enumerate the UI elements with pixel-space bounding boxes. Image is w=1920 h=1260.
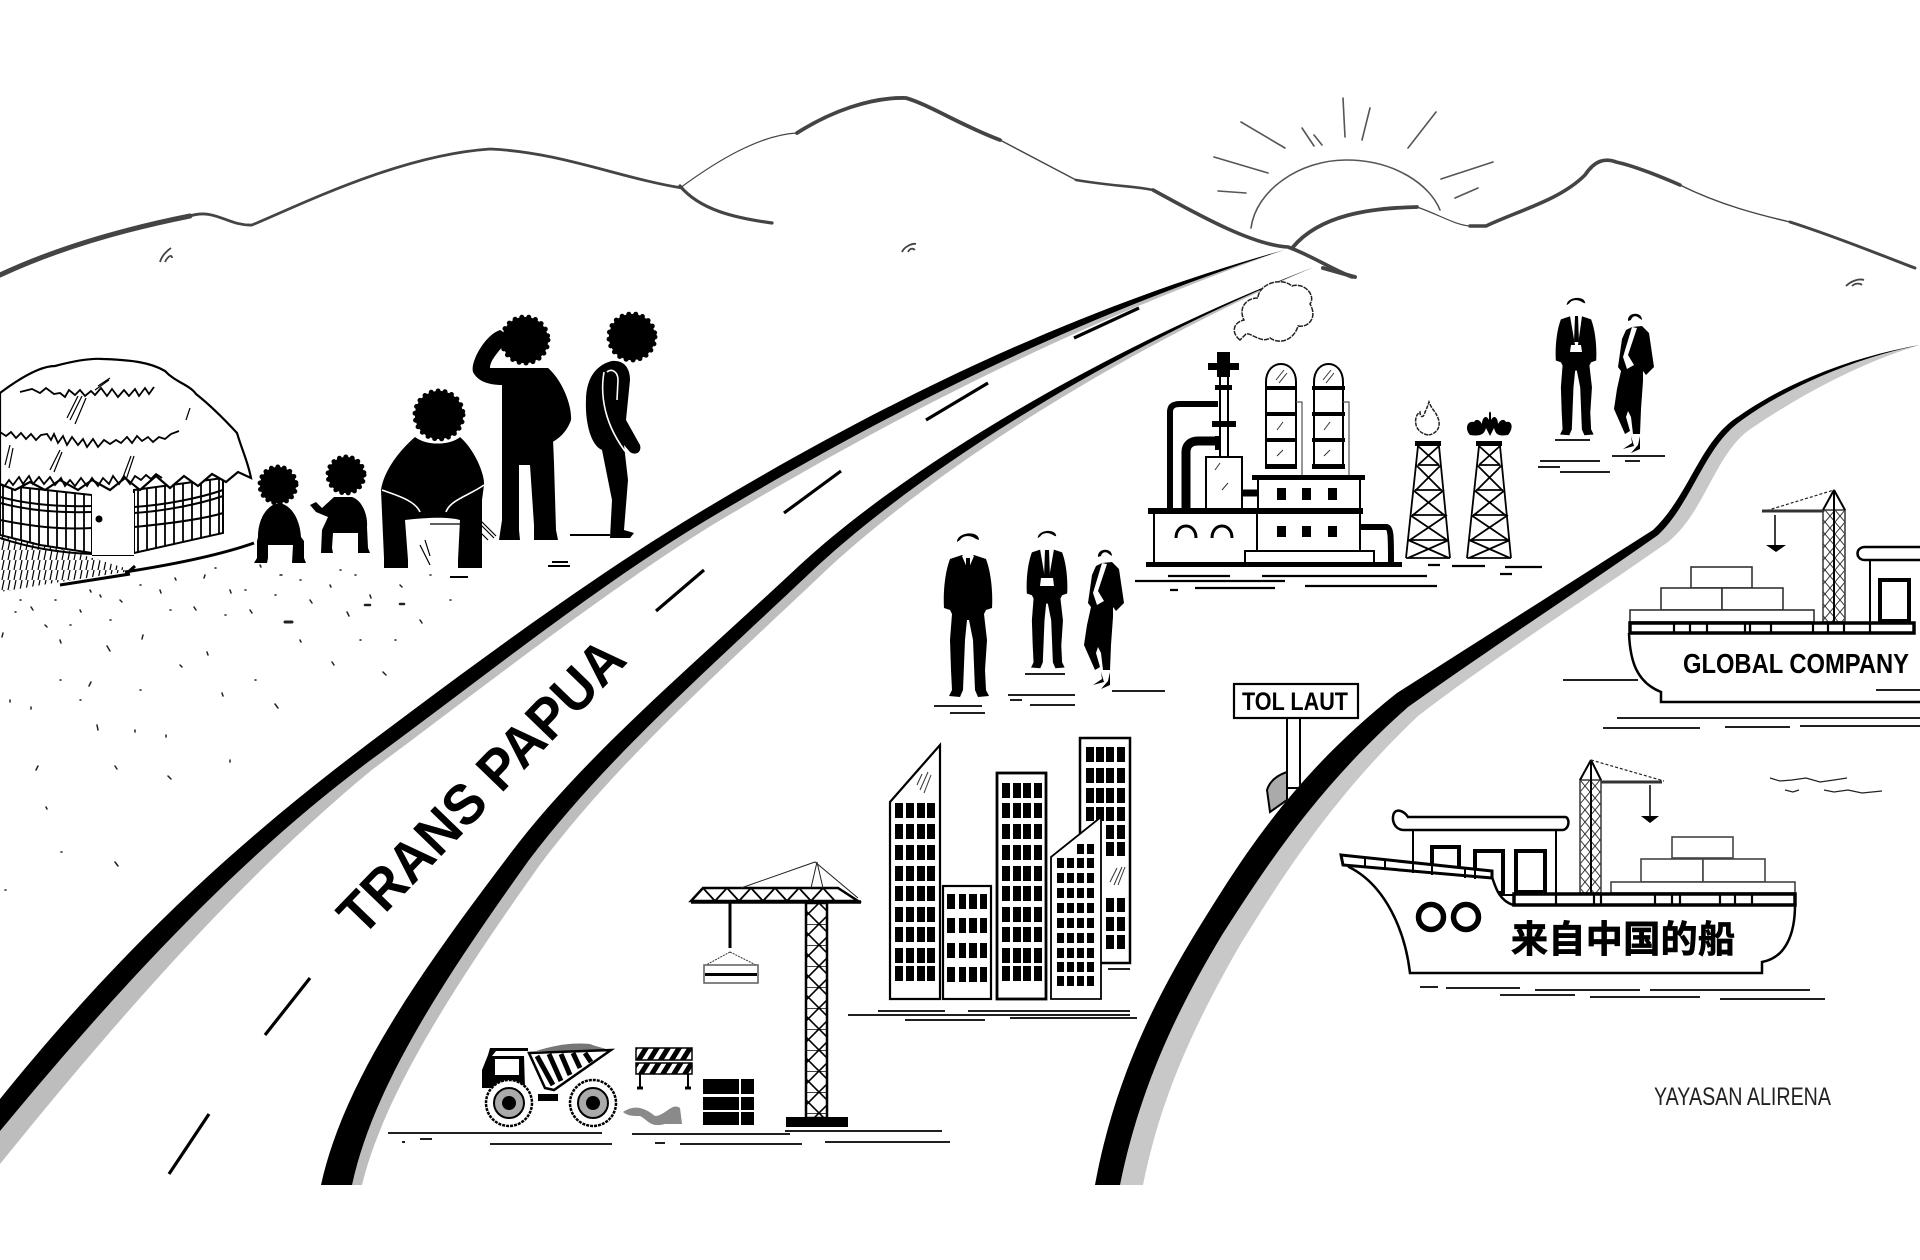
road title: TRANS PAPUA: [325, 626, 638, 947]
person: standing, side view: [586, 314, 655, 538]
refinery: pipes: [1170, 404, 1218, 508]
hut: skirt: [0, 535, 125, 592]
hut: thatch marks: [5, 378, 190, 480]
hut: [0, 359, 254, 592]
oil derrick with black plume: [1467, 412, 1512, 558]
crane boom: [691, 888, 861, 902]
building: short block: [943, 886, 991, 999]
sign post: [1287, 718, 1300, 788]
sign: Tol Laut: TOL LAUT: [1242, 688, 1348, 716]
hut: thatch fringes: [0, 387, 179, 487]
city buildings: [848, 738, 1137, 1020]
ground marks under people: [450, 535, 610, 577]
shadows: [934, 674, 1165, 713]
china ship: crane: [1580, 760, 1664, 893]
global ship: hull: [1629, 633, 1920, 702]
china ship: portholes: [1418, 904, 1478, 930]
building: back tower: [1080, 738, 1130, 963]
sun with rays: [1214, 98, 1493, 228]
sign rubble: [1267, 772, 1287, 812]
businessman 1: [944, 533, 992, 697]
china ship: name: 来自中国的船: [1511, 909, 1735, 963]
ground lines: city: [848, 969, 1137, 1020]
truck: dump bed: [529, 1050, 611, 1090]
credit: YAYASAN ALIRENA: [1654, 1083, 1831, 1111]
china ship: cabin: [1393, 811, 1568, 895]
ground lines: construction site: [388, 1131, 950, 1144]
refinery: lower block: [1154, 511, 1360, 563]
refinery: towers: [1266, 364, 1296, 465]
hut: walls: [0, 478, 223, 555]
waves: [1770, 778, 1882, 793]
businessman 2: [1027, 531, 1067, 668]
china ship: water: [1420, 987, 1825, 999]
crane load: [704, 952, 758, 983]
building: tall tower: [997, 773, 1046, 999]
ship from China: [1341, 760, 1825, 999]
global ship: cabin: [1858, 547, 1920, 622]
refinery: stack: [1220, 372, 1228, 458]
crane apex and cables: [741, 862, 858, 898]
truck: cab: [482, 1048, 528, 1088]
crane mast: [806, 903, 827, 1118]
road: left edge: [0, 250, 1284, 1164]
businesswoman: [1614, 314, 1654, 453]
businessman: [1556, 298, 1596, 435]
hut: door: [92, 493, 134, 555]
crane hook: [728, 903, 732, 948]
ground line near hut: [60, 543, 254, 585]
ground lines: refinery: [1135, 565, 1542, 590]
mountains: [0, 98, 1915, 277]
china ship: bow rail: [1341, 855, 1492, 879]
plume: [1467, 412, 1512, 436]
global ship: containers: [1630, 567, 1814, 622]
china ship: containers: [1611, 837, 1795, 893]
oil derrick with flame: [1406, 402, 1450, 558]
business trio: [934, 531, 1165, 713]
china ship: hull: [1349, 862, 1795, 973]
global ship: crane: [1762, 490, 1845, 622]
refinery: small tank: [1206, 457, 1242, 509]
gray dirt pile: [623, 1107, 682, 1125]
coastline road: [1095, 345, 1920, 1185]
sign: Tol Laut: [1234, 684, 1358, 812]
ground hatching: [420, 520, 496, 565]
ground texture: left field: [2, 565, 451, 890]
crane base: [786, 1117, 848, 1127]
truck: rear wheel: [570, 1080, 616, 1126]
global ship: deck: [1630, 623, 1914, 633]
ship: Global Company: [1563, 490, 1920, 728]
building: left slanted tower: [890, 745, 940, 999]
building: front slanted tower: [1051, 817, 1101, 999]
factory smoke cloud: [1234, 282, 1313, 341]
person: standing, hand on head: [473, 317, 571, 540]
refinery: upper block: [1258, 478, 1360, 510]
refinery: glints: [1215, 370, 1334, 490]
global ship: water: [1563, 680, 1920, 728]
person: seated child 1: [254, 467, 306, 563]
person: seated child 2: [310, 457, 370, 553]
person: seated adult: [381, 391, 496, 568]
road barricade: [636, 1048, 692, 1088]
oil refinery: [1146, 352, 1402, 567]
grass ticks on mountains: [160, 244, 1864, 286]
businessmen pair: [1538, 298, 1665, 472]
road: right edge: [321, 267, 1314, 1185]
shadows: [1538, 440, 1665, 472]
construction crane: [691, 862, 861, 1127]
truck: chassis: [538, 1094, 558, 1101]
sign board: [1234, 684, 1358, 718]
flame: [1416, 402, 1439, 435]
truck: dirt load: [536, 1043, 610, 1051]
china ship: deck: [1514, 894, 1795, 905]
truck: front wheel: [486, 1080, 532, 1126]
brick stack: [703, 1079, 754, 1125]
hut: thatched roof: [0, 359, 251, 490]
dump truck: [482, 1043, 616, 1126]
businesswoman: [1084, 550, 1124, 689]
road: centre dashes: [169, 308, 1139, 1174]
